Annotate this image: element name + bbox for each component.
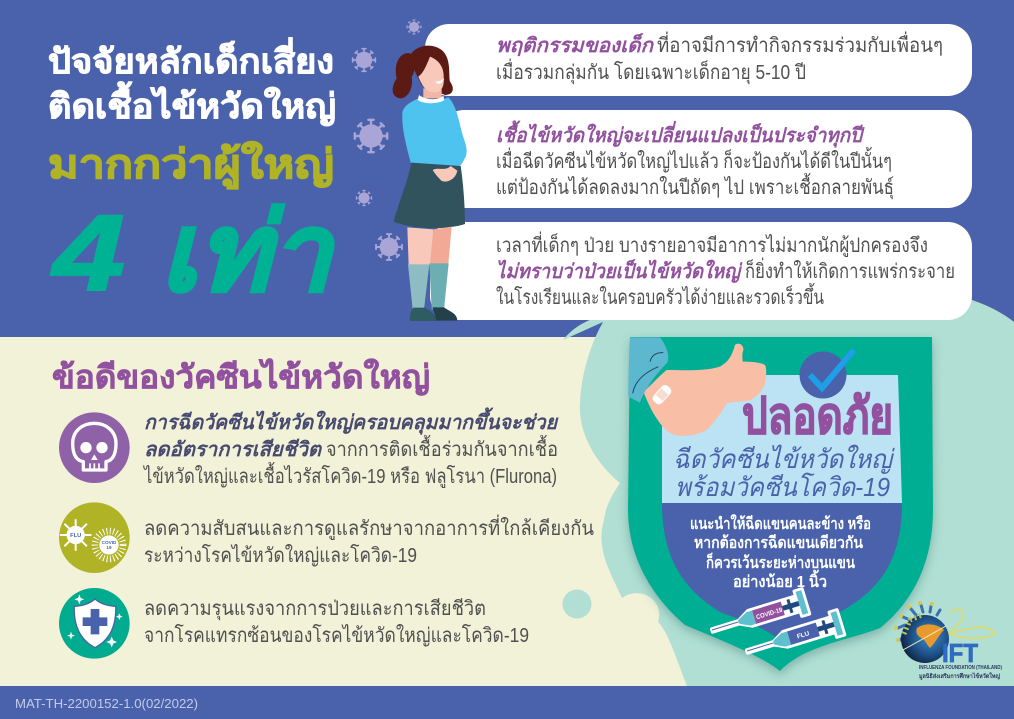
panel 2 text [496,120,894,200]
shield blue panel [662,503,902,640]
vaccine line 1: ฉีดวัคซีนไข้หวัดใหญ่ [673,444,895,474]
advice text: หากต้องการฉีดแขนเดียวกัน [694,533,863,552]
logo thai name: มูลนิธิส่งเสริมการศึกษาไข้หวัดใหญ่ [919,672,1000,681]
panel 2 text: แต่ป้องกันได้ลดลงมากในปีถัดๆ ไป เพราะเชื้อกลายพันธุ์ [496,173,894,200]
benefit 3 [59,588,529,659]
panel 1 text: เมื่อรวมกลุ่มกัน โดยเฉพาะเด็กอายุ 5-10 ปี [496,58,806,85]
advice text: อย่างน้อย 1 นิ้ว [733,569,827,591]
cream lower background [0,337,1014,686]
top blue background [0,0,1014,337]
shield light panel [662,375,902,503]
shield callout [628,337,933,671]
benefit 1 [59,407,559,489]
icon: flu and covid viruses: FLU [70,533,81,539]
icon: covid syringe [708,589,810,642]
panel: child behaviour [425,24,972,96]
icon: flu syringe [743,610,845,663]
headline line 1: ปัจจัยหลักเด็กเสี่ยง [48,37,334,81]
benefit 2 text [144,514,594,567]
benefit 3 text: ลดความรุนแรงจากการป่วยและการเสียชีวิต [144,598,486,621]
panel 1 text: พฤติกรรมของเด็ก [496,33,655,57]
benefit 1 text: ลดอัตราการเสียชีวิต [144,438,323,461]
icon: skull [59,412,130,483]
mint decorative circle [562,590,592,618]
benefit 2 text: ลดความสับสนและการดูแลรักษาจากอาการที่ใกล้เคียงกัน [144,514,594,541]
headline line 2: ติดเชื้อไข้หวัดใหญ่ [48,81,336,127]
logo globe [901,615,949,663]
advice text: ก็ควรเว้นระยะห่างบนแขน [706,551,855,572]
benefit 2 text: ระหว่างโรคไข้หวัดใหญ่และโควิด-19 [144,544,417,567]
footer code: MAT-TH-2200152-1.0(02/2022) [15,697,198,711]
panel 1 text [496,31,943,85]
icon: check mark [800,350,854,398]
advice text [690,514,871,591]
panel 3 text: เวลาที่เด็กๆ ป่วย บางรายอาจมีอาการไม่มากนักผู้ปกครองจึง [496,231,928,258]
mint blob background [563,285,1014,686]
logo swoosh [930,610,995,642]
panel 1 text: ที่อาจมีการทำกิจกรรมร่วมกับเพื่อนๆ [657,31,943,57]
logo virus spikes [898,605,940,640]
headline number 4: 4 [51,192,125,313]
headline times: เท่า [160,192,335,313]
panel 3 text: ก็ยิ่งทำให้เกิดการแพร่กระจาย [745,257,955,283]
benefit 1 text [142,407,559,489]
logo english name: INFLUENZA FOUNDATION (THAILAND) [919,665,1002,671]
safe headline: ปลอดภัย [742,388,893,444]
logo dotted region [904,615,922,634]
footer bar [0,686,1014,719]
benefits heading: ข้อดีของวัคซีนไข้หวัดใหญ่ [52,358,430,396]
panel 3 text: ไม่ทราบว่าป่วยเป็นไข้หวัดใหญ่ [496,259,743,283]
virus particles [353,20,421,260]
icon: flu and covid viruses: COVID [102,540,117,545]
advice text: แนะนำให้ฉีดแขนคนละข้าง หรือ [690,514,871,533]
icon: medical shield [59,588,130,659]
IFT logo [896,603,1002,681]
benefit 3 text [144,598,529,647]
panel 3 text: ในโรงเรียนและในครอบครัวได้ง่ายและรวดเร็วขึ้น [496,283,824,309]
girl illustration [393,46,467,321]
headline [48,37,336,313]
shield outer shape [628,337,933,671]
logo letters: IFT [942,638,978,668]
benefit 1 text: การฉีดวัคซีนไข้หวัดใหญ่ครอบคลุมมากขึ้นจะช่วย [144,407,559,435]
benefit 1 text: จากการติดเชื้อร่วมกันจากเชื้อ [326,435,558,461]
icon: flu and covid viruses: 19 [106,545,112,550]
benefit 1 text: ไข้หวัดใหญ่และเชื้อไวรัสโควิด-19 หรือ ฟลูโรนา (Flurona) [142,462,557,489]
benefit 2 [59,502,594,573]
panel: virus mutation [440,110,972,208]
logo dots [896,603,932,640]
logo beam [903,626,946,650]
icon: covid syringe: COVID-19 [755,607,784,621]
icon: flu syringe: FLU [796,630,811,641]
headline line 3: มากกว่าผู้ใหญ่ [48,141,334,189]
icon: flu and covid viruses [59,502,130,573]
panel: unnoticed illness [430,222,972,320]
vaccine line 2: พร้อมวัคซีนโควิด-19 [675,472,890,502]
panel 2 text: เมื่อฉีดวัคซีนไข้หวัดใหญ่ไปแล้ว ก็จะป้องกันได้ดีในปีนั้นๆ [496,147,892,173]
panel 3 text [496,231,955,309]
icon: arm with bandage [628,337,766,436]
benefit 3 text: จากโรคแทรกซ้อนของโรคไข้หวัดใหญ่และโควิด-19 [144,624,529,647]
panel 2 text: เชื้อไข้หวัดใหญ่จะเปลี่ยนแปลงเป็นประจำทุกปี [496,120,865,148]
logo landmass [916,624,944,648]
